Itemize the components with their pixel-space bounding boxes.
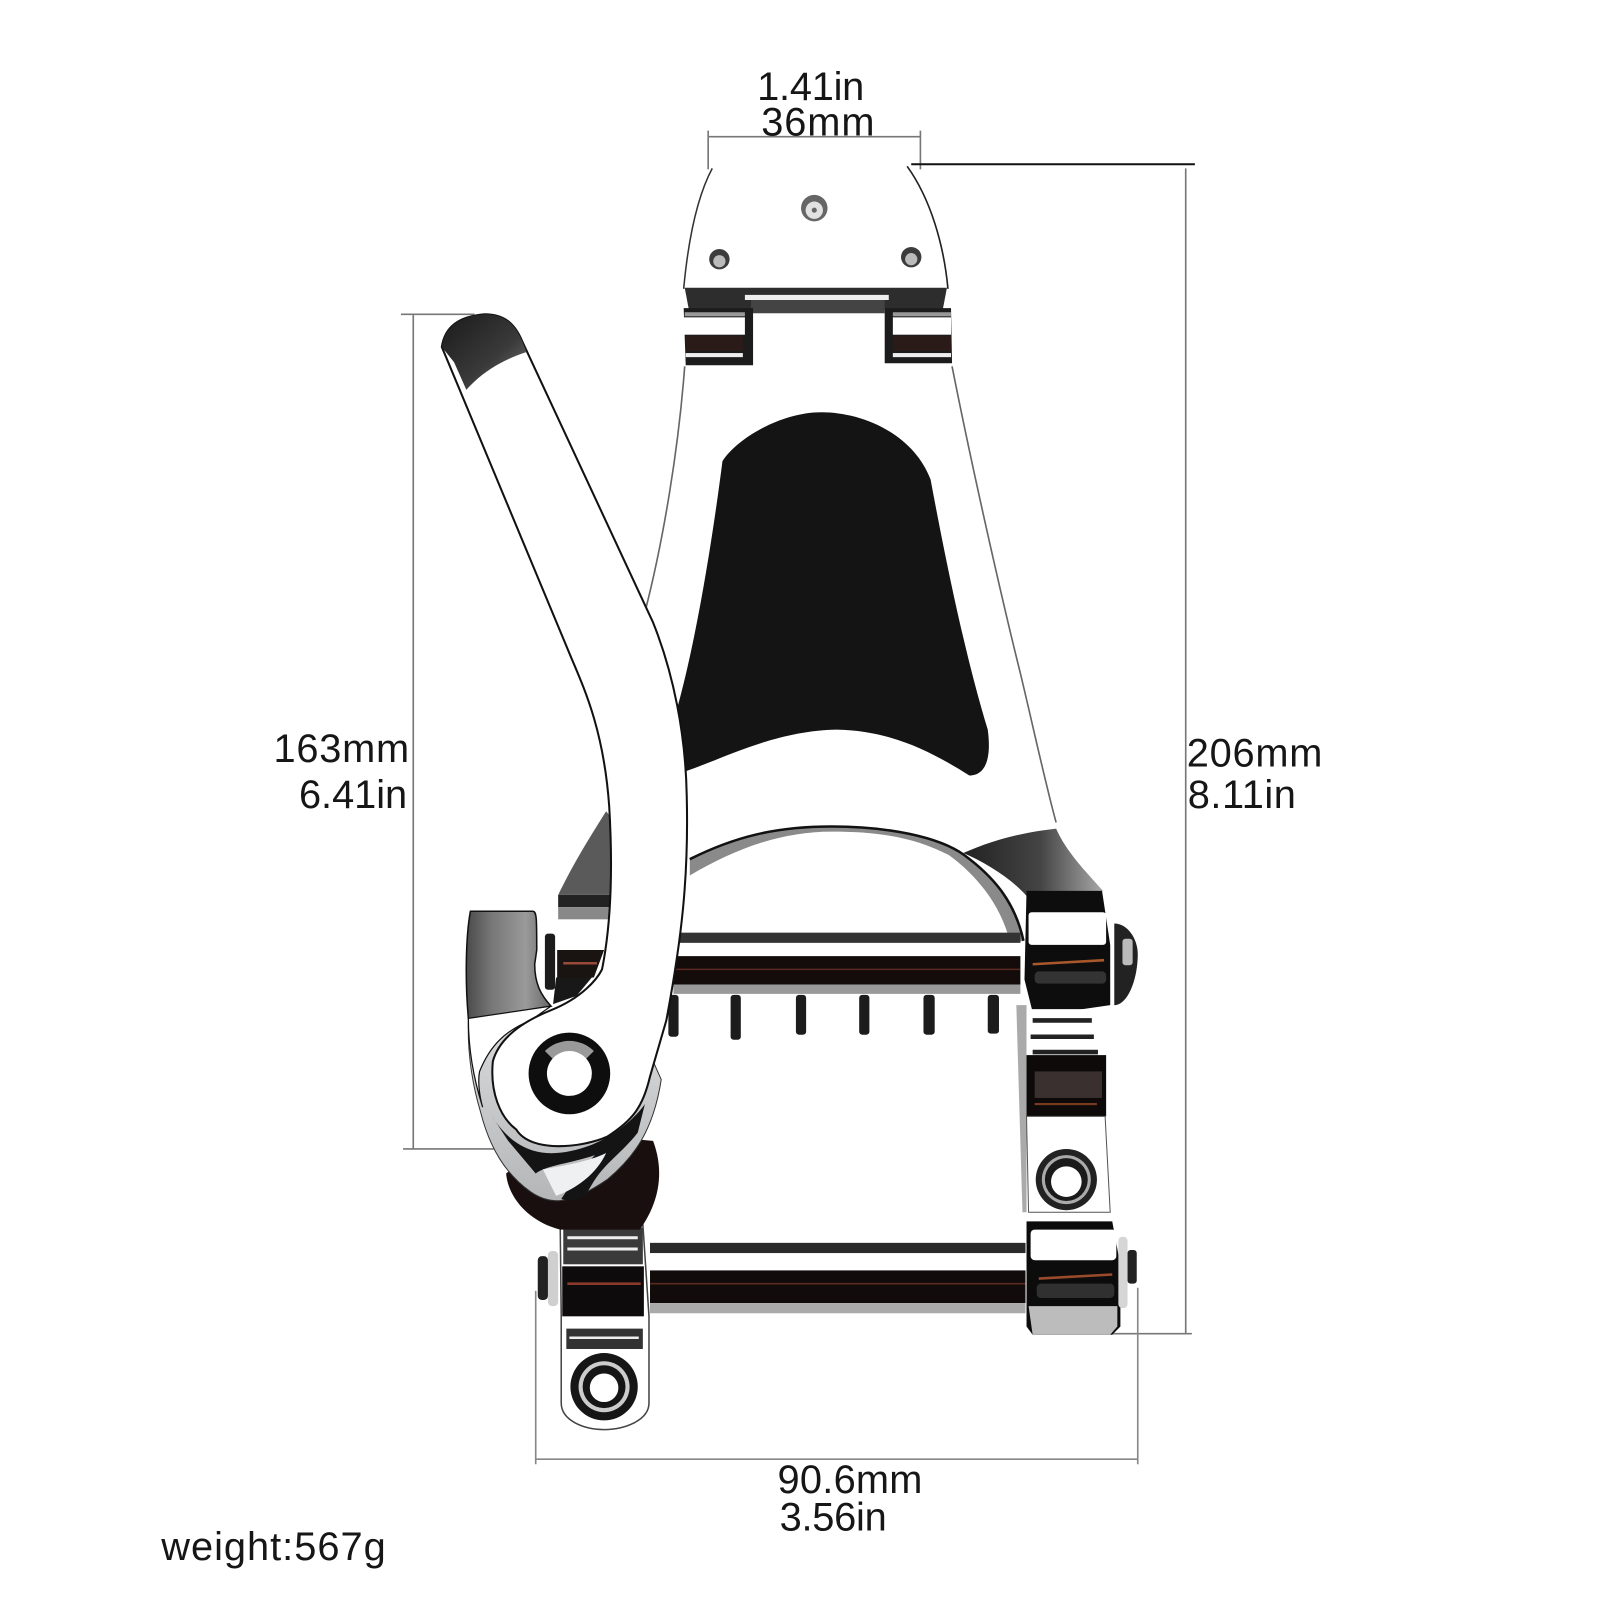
dimension: lever height [273,314,510,1149]
dimension: lever height: 6.41in [299,773,407,817]
dimension: top width [708,65,920,169]
dimension: overall height [911,164,1322,1334]
hinge right [885,308,952,363]
left lower block and foot [538,1224,649,1430]
tailpiece [442,166,1138,1430]
weight label: weight:567g [160,1525,386,1569]
dimension: top width: 1.41in [757,65,864,109]
body outline [645,366,1056,822]
lever tip [442,314,527,390]
lower rod [650,1243,1026,1313]
top plate [684,166,948,313]
chrome lower lever casing [468,1018,661,1201]
upper rod [673,933,1020,994]
white lever side plate [468,1006,551,1107]
white wedge [543,1153,606,1196]
dimension: base width: 90.6mm [778,1458,922,1502]
left upper body section [545,808,611,1004]
lever handle [442,314,687,1146]
dimension: base width [536,1288,1138,1540]
right lower block [1027,1221,1137,1335]
clamp block [466,911,551,1018]
string pins [668,995,999,1040]
wing [963,829,1103,896]
dimension: overall height: 206mm [1187,731,1322,775]
dimension: base width: 3.56in [780,1496,887,1540]
hinge left [684,308,753,365]
dark crease under lever hub [491,1104,645,1200]
dimension: top width: 36mm [761,101,874,145]
arch [690,827,1023,943]
dimension: lever height: 163mm [273,727,409,771]
right centre bracket [1016,1005,1110,1212]
round base disk [506,1137,659,1230]
lever pivot screw [529,1033,610,1114]
right upper block [1024,891,1138,1012]
dimension: overall height: 8.11in [1188,773,1296,817]
black rubber pad [676,412,989,776]
